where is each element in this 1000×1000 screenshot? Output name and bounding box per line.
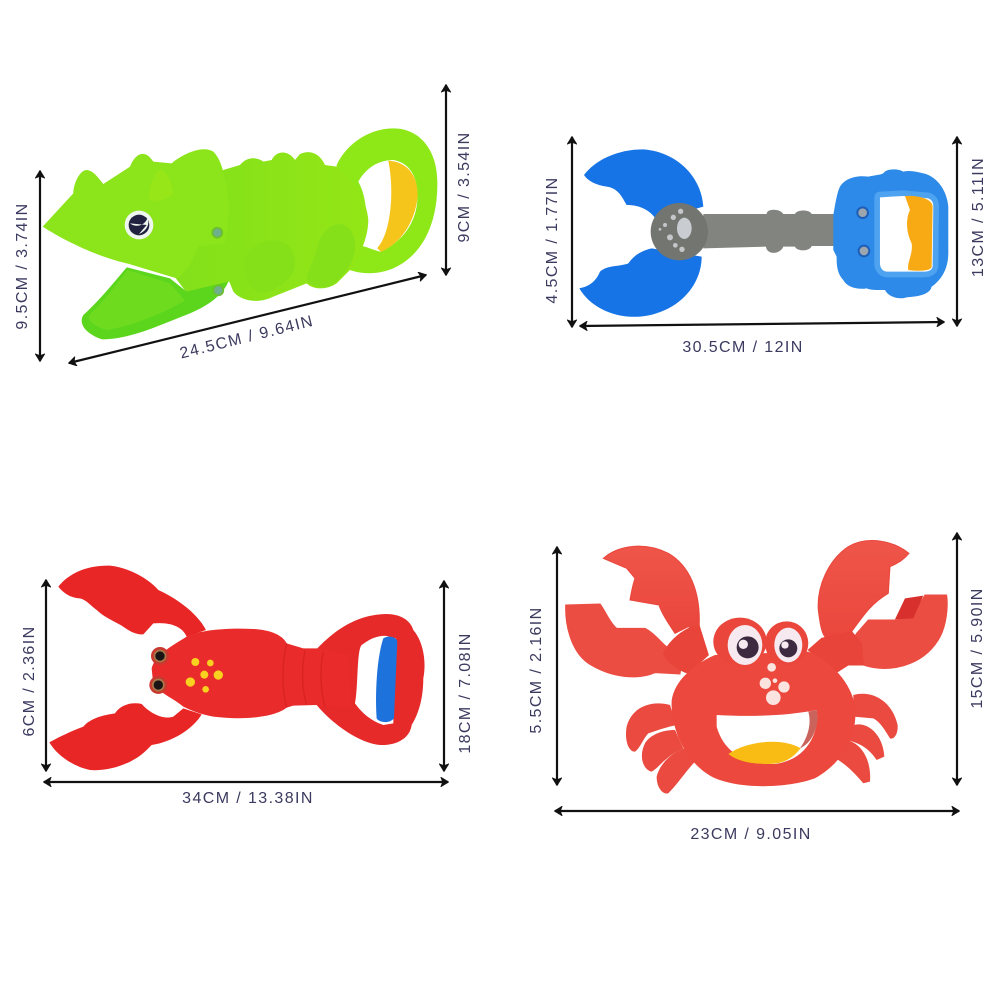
dimension: dinosaur 9cm: 9CM / 3.54IN xyxy=(456,131,473,243)
lobster upper claw xyxy=(58,566,206,637)
toy: red crab grabber xyxy=(566,541,947,794)
dimension: blue 30.5cm: 30.5CM / 12IN xyxy=(682,339,804,356)
blue handle xyxy=(833,169,948,298)
dimension: lobster 6cm: 6CM / 2.36IN xyxy=(21,625,38,737)
lobster body xyxy=(152,629,352,718)
lobster handle xyxy=(317,614,425,745)
lobster yellow dots xyxy=(186,658,223,693)
toy: green dinosaur grabber xyxy=(43,128,437,339)
toy: blue claw grabber xyxy=(579,149,948,317)
dinosaur body xyxy=(173,152,368,301)
crab left upper claw xyxy=(603,546,699,633)
crab body xyxy=(672,652,855,786)
crab yellow grip xyxy=(728,742,801,764)
dinosaur yellow grip xyxy=(378,161,418,252)
crab eye stalks xyxy=(713,618,808,666)
dinosaur legs xyxy=(243,224,355,292)
dimension: blue 13cm: 13CM / 5.11IN xyxy=(970,157,987,277)
crab legs xyxy=(626,694,898,794)
dimension: lobster 18cm: 18CM / 7.08IN xyxy=(457,632,474,754)
crab right upper claw xyxy=(818,541,909,645)
dinosaur head xyxy=(43,149,229,278)
crab left lower claw xyxy=(566,604,682,677)
lobster eyes xyxy=(149,647,169,694)
crab eyes xyxy=(728,625,802,665)
dimension: crab 15cm: 15CM / 5.90IN xyxy=(969,587,986,709)
crab mouth inner edge xyxy=(800,710,817,748)
dimension: crab 5.5cm: 5.5CM / 2.16IN xyxy=(528,606,545,734)
crab mouth xyxy=(717,710,817,764)
handle screws xyxy=(857,207,869,256)
handle opening xyxy=(880,196,933,272)
blue upper claw xyxy=(584,149,703,220)
crab right lower claw xyxy=(848,595,947,668)
dimension: blue 4.5cm: 4.5CM / 1.77IN xyxy=(544,176,561,304)
blue lower claw xyxy=(579,248,702,317)
dinosaur jaw plate xyxy=(89,270,185,330)
dimension: dinosaur 24.5cm: 24.5CM / 9.64IN xyxy=(178,313,316,363)
lobster lower claw xyxy=(49,703,202,770)
lobster body segments xyxy=(283,643,325,708)
dinosaur nose horn xyxy=(148,169,173,201)
dinosaur handle loop xyxy=(337,128,437,273)
lobster blue grip xyxy=(376,637,397,722)
dimension: blue 30.5cm xyxy=(580,322,944,356)
crab right claw inner xyxy=(895,596,923,619)
dimension: dinosaur 24.5cm xyxy=(69,275,426,363)
dimension: crab 23cm: 23CM / 9.05IN xyxy=(690,826,812,843)
dinosaur lower jaw xyxy=(82,267,228,339)
orange grip xyxy=(905,196,933,271)
toy: red lobster grabber xyxy=(49,566,425,770)
crab white spots xyxy=(760,663,790,705)
dimension: lobster 34cm: 34CM / 13.38IN xyxy=(182,790,314,807)
grey hub with crab logo xyxy=(651,203,708,260)
dinosaur eye xyxy=(125,211,153,239)
grey arm xyxy=(703,210,837,253)
dinosaur screws xyxy=(212,228,223,295)
crab arm joints xyxy=(663,625,863,673)
dimension: dinosaur 9.5cm: 9.5CM / 3.74IN xyxy=(14,202,31,330)
